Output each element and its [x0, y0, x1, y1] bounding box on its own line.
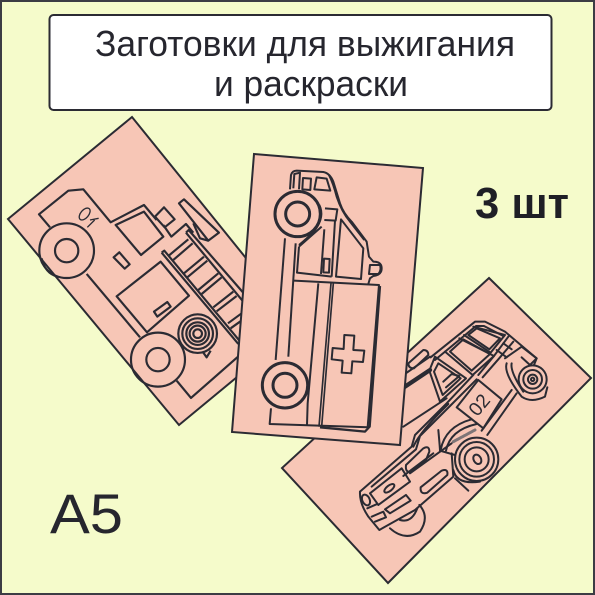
panel: jeep card — [282, 278, 591, 583]
fender slot — [421, 470, 447, 493]
title box — [50, 15, 552, 110]
hood — [370, 468, 410, 505]
roof and pillars — [429, 322, 537, 402]
icon: fire truck — [39, 189, 247, 398]
number 02: 02 — [465, 391, 495, 421]
front wheel — [453, 438, 498, 491]
rear fender and bumper — [505, 347, 547, 400]
door with number — [457, 380, 502, 428]
wheel arch — [438, 419, 477, 455]
nose and lights — [360, 453, 453, 530]
rear wheel — [519, 365, 547, 393]
title line 2: и раскраски — [214, 63, 408, 104]
side sill lines — [360, 375, 473, 492]
hidden wheel — [390, 505, 425, 536]
quantity label: 3 шт — [475, 179, 569, 228]
icon: off-road car — [360, 322, 547, 536]
panel: ambulance card — [232, 154, 423, 445]
title line 1: Заготовки для выжигания — [95, 23, 515, 64]
roof rack — [403, 350, 430, 387]
format label: А5 — [50, 482, 123, 545]
panel: fire truck card — [8, 117, 300, 425]
icon: ambulance — [262, 171, 382, 432]
hood slot — [406, 447, 429, 472]
